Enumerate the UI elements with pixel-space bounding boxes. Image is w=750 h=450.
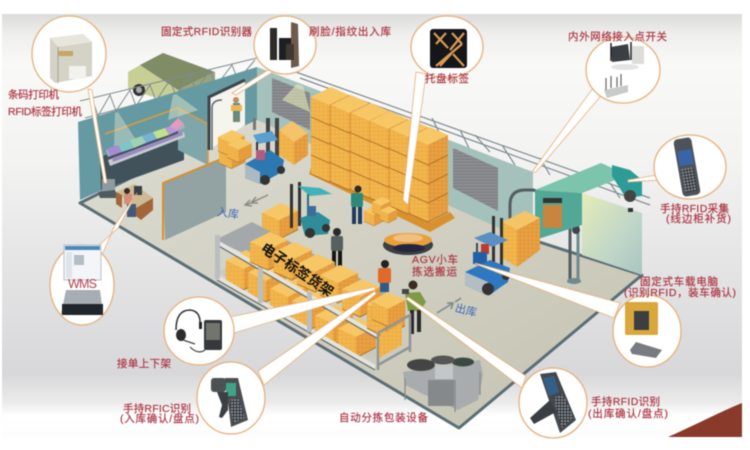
- label: face and fingerprint: 刷脸/指纹出入库: [309, 25, 391, 38]
- label: outbound handheld: 手持RFID识别: [591, 395, 660, 408]
- low dark wall of apparel room: [100, 128, 184, 190]
- label: vehicle computer: (识别RFID，装车确认): [624, 286, 736, 299]
- warehouse floor: [80, 115, 642, 428]
- large pallet stack: [309, 87, 455, 232]
- label: pallet tag: 托盘标签: [425, 72, 470, 85]
- electronic shelf: [215, 222, 405, 370]
- icon: printer: [50, 34, 92, 83]
- callout: WMS: [50, 193, 137, 325]
- label: barcode printer: 条码打印机: [8, 88, 60, 101]
- cashier desk and printer: [98, 179, 153, 220]
- label: packing equipment: 自动分拣包装设备: [339, 411, 428, 424]
- small box group near door: [218, 130, 252, 169]
- icon: routers: [604, 42, 644, 98]
- dock truck: [535, 163, 642, 240]
- label: vehicle computer: 固定式车载电脑: [640, 275, 718, 288]
- floor inbound arrow: [245, 195, 268, 206]
- dock side wall: [582, 193, 642, 275]
- callout: pallet tag: [403, 16, 483, 205]
- left distant truck: [128, 53, 215, 102]
- callout: headset order picking: [164, 287, 375, 365]
- label: AGV: 拣选搬运: [412, 265, 458, 278]
- label: inbound handheld: [120, 402, 199, 425]
- icon: server: [61, 290, 103, 315]
- icon: pallet tag: [430, 29, 467, 68]
- callout: handheld RFID collector: [628, 135, 726, 199]
- callout: network switch: [532, 37, 660, 172]
- label: RFID label printer: RFID标签打印机: [8, 105, 82, 118]
- icon: headset and PDA: [176, 310, 222, 352]
- label: WMS: WMS: [68, 277, 97, 291]
- callout: barcode printer: [32, 16, 107, 183]
- label: inbound handheld: (入库确认/盘点): [120, 412, 199, 425]
- right back wall: [257, 67, 533, 243]
- icon: vehicle terminal: [625, 302, 662, 358]
- label: electronic-tag shelf: 电子标签货架: [258, 240, 337, 300]
- worker with tablet at shelf: [331, 228, 343, 267]
- icon: scanner: [211, 378, 248, 427]
- label: outbound handheld: [588, 395, 668, 420]
- forklift back: [245, 118, 308, 185]
- loose boxes on floor: [364, 197, 397, 226]
- label: handheld RFID collect: 手持RFID采集: [660, 202, 730, 215]
- left back wall: [78, 67, 257, 200]
- roof truss right: [290, 70, 650, 205]
- label: AGV: AGV小车: [412, 253, 458, 266]
- callout: fixed RFID reader: [232, 16, 316, 95]
- label: handheld RFID collect: (线边柜补货): [666, 212, 731, 225]
- callout: inbound RFID scanner: [197, 291, 376, 434]
- corner swoosh: [668, 403, 742, 437]
- wall lamp cone: [282, 84, 310, 112]
- label: network: 内外网络接入点开关: [568, 30, 668, 43]
- rolling door back: [272, 78, 310, 130]
- label: AGV: [412, 253, 458, 278]
- worker green: [351, 186, 363, 224]
- packing machine: [403, 356, 483, 412]
- label: fixed RFID reader: 固定式RFID识别器: [161, 25, 252, 38]
- rolling door right: [453, 148, 498, 211]
- label: handheld RFID collect: [660, 202, 731, 225]
- floor outbound arrow: [437, 298, 461, 313]
- inbound door with worker: [209, 80, 256, 150]
- icon: WMS screen: [64, 245, 101, 280]
- icon: handheld: [673, 137, 701, 197]
- label: outbound handheld: (出库确认/盘点): [588, 407, 668, 420]
- partition wall: [163, 157, 226, 240]
- packing box and table: [372, 293, 410, 370]
- icon: RFID gate: [270, 22, 299, 68]
- AGV cart: [383, 233, 433, 255]
- forklift centre: [262, 182, 332, 239]
- icon: outbound scanner: [530, 372, 576, 433]
- label: take orders: 接单上下架: [117, 357, 172, 370]
- label: outbound: 出库: [454, 301, 478, 319]
- worker orange: [378, 260, 391, 292]
- label: inbound handheld: 手持RFIC识别: [123, 402, 191, 415]
- gate frame: [510, 190, 581, 284]
- callout: outbound RFID scanner: [406, 297, 587, 438]
- apparel shelf: [105, 94, 208, 166]
- forklift right: [465, 211, 540, 296]
- callout: vehicle-mounted computer: [475, 263, 681, 367]
- worker with scanner: [402, 280, 426, 334]
- label: inbound: 入库: [216, 206, 240, 221]
- roof truss left: [80, 58, 257, 118]
- label: vehicle computer: [624, 275, 736, 299]
